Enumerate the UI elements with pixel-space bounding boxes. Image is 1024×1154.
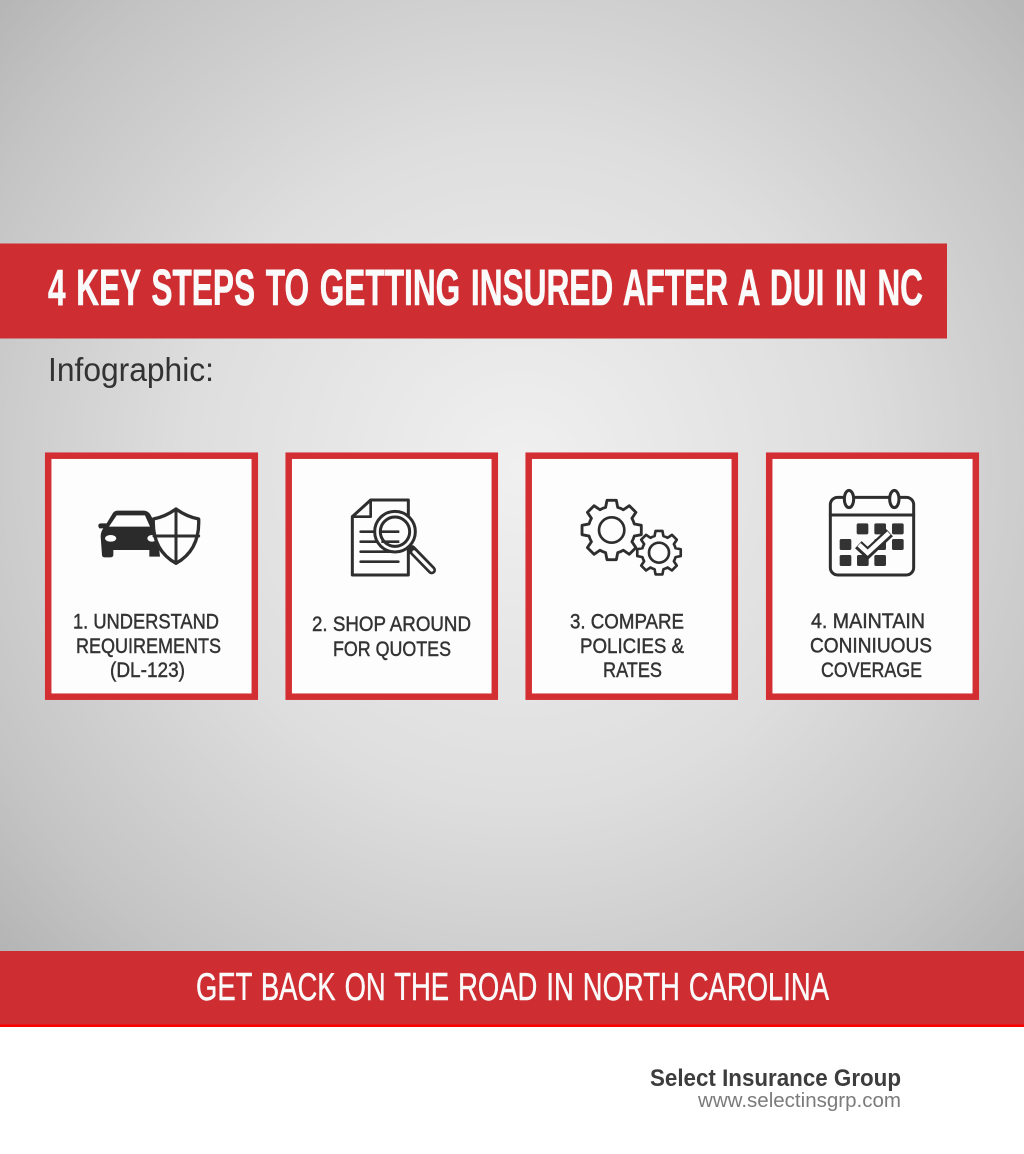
step 3 label: RATES (603, 659, 662, 682)
step 1 label: REQUIREMENTS (76, 635, 221, 658)
step 3 label (570, 610, 684, 682)
panel: step 1 (48, 456, 255, 697)
icon: gears (582, 500, 681, 574)
icon: document and magnifier (352, 500, 432, 575)
step 3 label: 3. COMPARE (570, 610, 684, 634)
subheading: Infographic: (48, 351, 214, 388)
step 2 label: 2. SHOP AROUND (312, 613, 471, 636)
step 4 label: COVERAGE (821, 659, 922, 682)
step 2 label: FOR QUOTES (333, 638, 451, 661)
panel: step 3 (529, 456, 735, 697)
company name and website (650, 1065, 901, 1112)
panel: step 2 (289, 456, 495, 697)
step 1 label (73, 610, 221, 682)
panel: step 4 (769, 456, 976, 697)
icon: car and shield (98, 509, 199, 563)
step 1 label: 1. UNDERSTAND (73, 610, 219, 634)
company name and website: Select Insurance Group (650, 1065, 901, 1092)
step 4 label: 4. MAINTAIN (811, 610, 925, 633)
step 2 label (312, 613, 471, 661)
step 4 label: CONINIUOUS (810, 634, 932, 658)
icon: calendar with check (830, 490, 914, 575)
step 1 label: (DL-123) (110, 659, 185, 682)
white footer area (0, 1027, 1024, 1154)
company name and website: www.selectinsgrp.com (697, 1090, 901, 1112)
footer banner (0, 951, 1024, 1027)
step 3 label: POLICIES & (580, 635, 684, 658)
step 4 label (810, 610, 932, 682)
title banner (0, 244, 947, 338)
